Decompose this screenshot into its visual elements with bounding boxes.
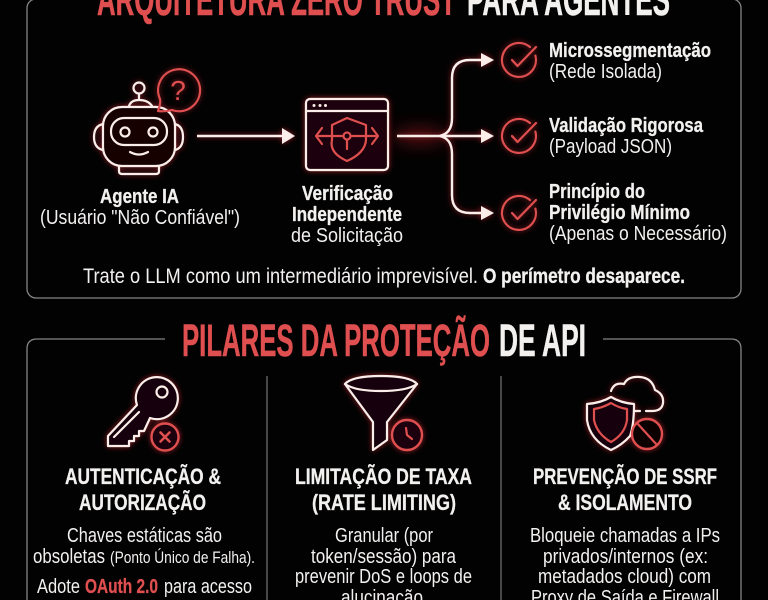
text: ssrf prevention description: privados/internos (ex: <box>543 546 708 568</box>
text: authentication description: OAuth 2.0 <box>85 576 158 598</box>
label: least privilege <box>549 181 727 245</box>
icon: funnel with clock <box>345 376 422 450</box>
text: authentication description: Adote <box>37 576 80 598</box>
heading: rate limiting: LIMITAÇÃO DE TAXA <box>295 464 472 489</box>
text: rate limiting description: Granular (por <box>335 525 433 547</box>
label: independent verification: Independente <box>292 204 402 226</box>
divider: column one and two <box>266 376 268 600</box>
arrows: branching to three controls <box>397 53 494 220</box>
text: authentication description: Chaves estáticas são <box>67 525 222 547</box>
heading: ssrf prevention: & ISOLAMENTO <box>558 490 692 515</box>
icon: browser window with shield <box>306 99 388 170</box>
label: microsegmentation: (Rede Isolada) <box>549 61 662 83</box>
icon: key with x <box>108 377 178 450</box>
label: independent verification: Verificação <box>302 183 393 205</box>
heading: authentication: AUTENTICAÇÃO & <box>65 464 221 489</box>
label: agent <box>40 186 240 229</box>
glow: branch junction <box>394 130 446 142</box>
label: validation <box>549 115 704 158</box>
label: microsegmentation <box>549 40 711 83</box>
divider: column two and three <box>500 376 502 600</box>
label: least privilege: (Apenas o Necessário) <box>549 223 727 245</box>
heading: authentication: AUTORIZAÇÃO <box>79 490 206 515</box>
text: ssrf prevention description: Bloqueie chamadas a IPs <box>530 525 720 547</box>
label: microsegmentation: Microssegmentação <box>549 40 711 62</box>
text: authentication description <box>33 525 255 598</box>
label: least privilege: Princípio do <box>549 181 645 203</box>
text: footer statement: O perímetro desaparece. <box>483 265 685 288</box>
text: ssrf prevention description <box>530 525 720 600</box>
text: authentication description: para acesso <box>164 576 252 598</box>
heading: rate limiting: (RATE LIMITING) <box>312 490 456 515</box>
text: rate limiting description <box>295 525 472 600</box>
title: api pillars: PILARES DA PROTEÇÃO <box>182 315 490 366</box>
icon: check microsegmentation <box>502 43 536 77</box>
label: agent: (Usuário "Não Confiável") <box>40 207 240 229</box>
icon: robot agent with question bubble <box>94 69 200 174</box>
text: authentication description: (Ponto Único de Falha). <box>110 548 255 567</box>
label: least privilege: Privilégio Mínimo <box>549 202 690 224</box>
panel: zero trust architecture <box>27 0 741 298</box>
arrow: agent to verification <box>197 128 295 144</box>
heading: authentication <box>65 464 221 515</box>
text: rate limiting description: prevenir DoS e loops de <box>295 566 472 588</box>
icon: robot agent with question bubble: ? <box>170 75 186 106</box>
label: validation: Validação Rigorosa <box>549 115 704 137</box>
text: ssrf prevention description: metadados cloud) com <box>538 566 711 588</box>
icon: check least privilege <box>502 196 536 230</box>
text: footer statement: Trate o LLM como um intermediário imprevisível. <box>83 265 478 288</box>
text: authentication description: obsoletas <box>33 546 105 568</box>
text: rate limiting description: token/sessão) para <box>311 546 457 568</box>
label: independent verification: de Solicitação <box>291 225 403 247</box>
panel: api protection pillars <box>27 339 741 600</box>
heading: ssrf prevention: PREVENÇÃO DE SSRF <box>533 464 717 489</box>
icon: check validation <box>502 119 536 153</box>
heading: rate limiting <box>295 464 472 515</box>
title: api pillars: DE API <box>499 315 586 366</box>
label: agent: Agente IA <box>100 186 179 208</box>
heading: ssrf prevention <box>533 464 717 515</box>
icon: shield cloud and block sign <box>587 377 663 450</box>
label: independent verification <box>291 183 403 247</box>
label: validation: (Payload JSON) <box>549 136 672 158</box>
